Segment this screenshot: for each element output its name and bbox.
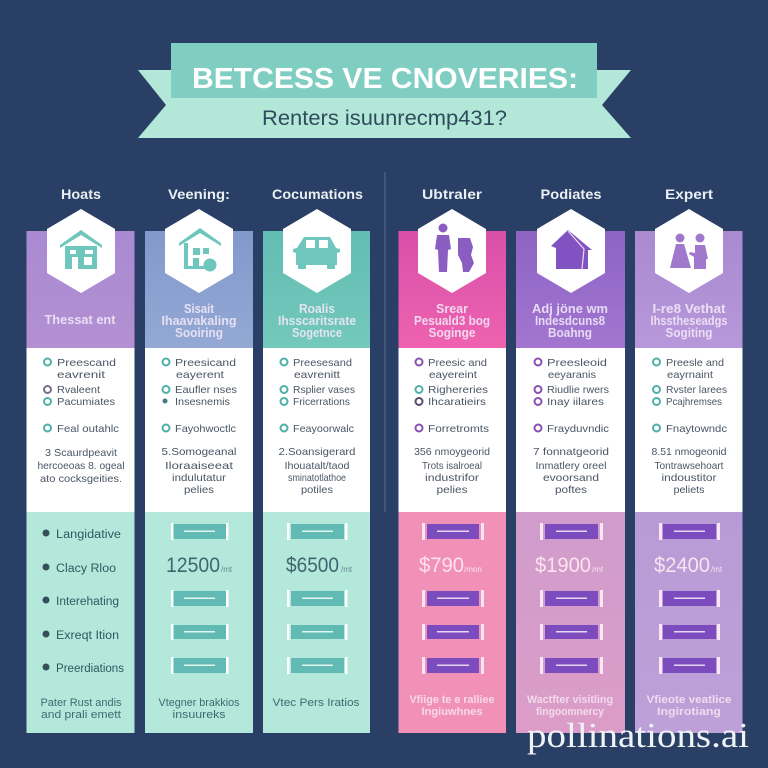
checklist [42, 529, 124, 675]
description: indulutatur [172, 472, 227, 484]
description: 3 Scaurdpeavit [45, 447, 117, 459]
feature list: eayereint [429, 369, 477, 381]
description: 7 fonnatgeorid [533, 446, 609, 458]
footer text: fingoomnercy [536, 706, 605, 718]
header text [532, 302, 608, 340]
feature list: eavrenit [57, 369, 105, 381]
feature list: Rvaleent [57, 384, 100, 396]
checklist: Interehating [56, 596, 119, 608]
heading: Podiates [540, 186, 602, 202]
header text: Ihaavakaling [162, 314, 236, 328]
description: indoustitor [662, 472, 717, 484]
header text: Sisait [184, 302, 215, 316]
description: potiles [301, 484, 333, 496]
checklist: Langidative [56, 529, 121, 541]
description: 356 nmoygeorid [414, 446, 490, 458]
header text: Roalis [299, 302, 335, 316]
panel: Ubtraler [398, 186, 506, 733]
description: poftes [555, 484, 587, 496]
header text: Ihsstheseadgs [650, 314, 728, 328]
panel: Cocumations [263, 186, 370, 733]
description: sminatotlathoe [288, 472, 346, 484]
price and plan bars: /mon [464, 565, 482, 574]
price and plan bars: $1900 [535, 554, 591, 577]
watermark: pollinations.ai [527, 716, 749, 755]
feature list: Forretromts [428, 423, 489, 435]
feature list: Preesic and [428, 357, 487, 369]
description: ato cocksgeities. [40, 473, 122, 485]
price and plan bars [166, 523, 233, 674]
footer text: Vfiige te e ralliee [410, 694, 494, 706]
feature list: Feayoorwalc [293, 423, 354, 435]
footer text: Ingirotiang [657, 706, 721, 718]
price and plan bars: /mt [341, 565, 353, 574]
footer text: Pater Rust andis [40, 697, 122, 709]
description [278, 446, 356, 496]
feature list: eeyaranis [548, 369, 596, 381]
price and plan bars [286, 523, 353, 674]
header text: I-re8 Vethat [652, 302, 726, 316]
header text: Pesuald3 bog [414, 314, 490, 328]
price and plan bars [654, 523, 723, 674]
price and plan bars: /mt [221, 565, 233, 574]
feature list: eayerent [176, 369, 224, 381]
feature list: Rvster larees [666, 384, 727, 396]
description: pelies [436, 484, 468, 496]
price and plan bars [419, 523, 484, 674]
description: Tontrawsehoart [654, 460, 724, 472]
subtitle: Renters isuunrecmp431? [262, 107, 507, 130]
footer text: Vtegner brakkios [158, 697, 240, 709]
feature list [534, 357, 609, 435]
center divider [384, 172, 386, 512]
heading: Ubtraler [422, 186, 483, 202]
icon: two people [435, 224, 474, 272]
footer text: insuureks [172, 709, 226, 721]
checklist: Clacy Rloo [56, 563, 116, 575]
feature list [416, 357, 489, 435]
feature list: Feal outahlc [57, 423, 119, 435]
description [38, 447, 124, 485]
checklist: Preerdiations [56, 663, 124, 675]
header text: Adj jöne wm [532, 302, 608, 316]
description: 5.Somogeanal [162, 446, 236, 458]
feature list [653, 357, 727, 435]
panel: Veening [145, 186, 253, 733]
description: Ihouatalt/taod [284, 460, 350, 472]
panel: Podiates [516, 186, 625, 733]
footer text: Ingiuwhnes [422, 706, 482, 718]
price and plan bars: /mt [592, 565, 604, 574]
footer text [527, 694, 613, 718]
header text: Sogiting [666, 326, 712, 340]
price and plan bars: /mt [711, 565, 723, 574]
feature list: Pcajhremses [666, 396, 722, 408]
feature list: Fayohwoctlc [175, 423, 236, 435]
header text [162, 302, 236, 340]
footer text: Wactfter visitling [527, 694, 613, 706]
feature list [44, 357, 119, 435]
footer text [410, 694, 494, 718]
heading: Expert [665, 186, 713, 202]
title banner [138, 43, 631, 138]
feature list: eavrenitt [294, 369, 340, 381]
header text: Boahng [548, 326, 592, 340]
description: 2.Soansigerard [278, 446, 356, 458]
feature list: Insesnemis [175, 396, 230, 408]
description: peliets [674, 484, 704, 496]
price and plan bars: $2400 [654, 554, 710, 577]
title: BETCESS VE CNOVERIES: [192, 63, 578, 95]
checklist: Exreqt Ition [56, 630, 119, 642]
price and plan bars [535, 523, 604, 674]
description: 8.51 nmogeonid [652, 446, 727, 458]
feature list: Preesleoid [547, 357, 607, 369]
header text: Sooiring [175, 326, 223, 340]
description [652, 446, 727, 496]
footer text: and prali emett [41, 709, 121, 721]
description: industrifor [425, 472, 480, 484]
feature list: Frayduvndic [547, 423, 609, 435]
header text [414, 302, 490, 340]
price and plan bars: $790 [419, 554, 464, 577]
feature list [280, 357, 355, 435]
feature list: Preescand [57, 357, 116, 369]
footer text: Vfieote veatlice [646, 694, 732, 706]
header text: Sogetnce [292, 326, 342, 340]
feature list: eayrnaint [667, 369, 713, 381]
icon: house [60, 230, 102, 269]
icon: car [293, 237, 340, 269]
price and plan bars: $6500 [286, 554, 339, 577]
banner ribbon [138, 70, 631, 138]
feature list: Pacumiates [57, 396, 115, 408]
description: evoorsand [543, 472, 599, 484]
feature list: Righereries [428, 384, 488, 396]
feature list: Riudlie rwers [547, 384, 609, 396]
description [162, 446, 236, 496]
footer text [646, 694, 732, 718]
header text [650, 302, 728, 340]
header text: Thessat ent [44, 313, 116, 327]
feature list: Fnaytowndc [666, 423, 727, 435]
feature list: Preesicand [175, 357, 236, 369]
header text: Srear [436, 302, 468, 316]
description: Trots isalroeal [422, 460, 482, 472]
footer text [158, 697, 240, 721]
header text [278, 302, 356, 340]
icon: purple house [551, 230, 592, 269]
feature list: Ihcaratieirs [428, 396, 486, 408]
description: hercoeoas 8. ogeal [38, 460, 124, 472]
feature list: Eaufler nses [175, 384, 237, 396]
panel: Expert [635, 186, 742, 733]
heading: Cocumations [272, 186, 363, 202]
header text: Indesdcuns8 [535, 314, 605, 328]
description: Iloraaiseeat [165, 460, 233, 472]
icon: two figures [670, 234, 708, 269]
header text: Ihsscaritsrate [278, 314, 356, 328]
heading: Hoats [61, 186, 101, 202]
feature list: Rsplier vases [293, 384, 355, 396]
header text: Soginge [428, 326, 476, 340]
heading: Veening: [168, 186, 230, 202]
description [414, 446, 490, 496]
price and plan bars: 12500 [166, 554, 220, 577]
feature list: Preesle and [666, 357, 724, 369]
description: pelies [184, 484, 214, 496]
icon: house with badge [179, 228, 221, 272]
description: Inmatlery oreel [536, 460, 606, 472]
feature list [162, 357, 237, 435]
footer text [40, 697, 122, 721]
feature list: Inay iilares [547, 396, 604, 408]
feature list: Preesesand [293, 357, 352, 369]
banner title plate [171, 43, 597, 98]
description [533, 446, 609, 496]
footer text: Vtec Pers Iratios [272, 697, 360, 709]
panel: Hoats [26, 186, 134, 733]
feature list: Fricerrations [293, 396, 350, 408]
